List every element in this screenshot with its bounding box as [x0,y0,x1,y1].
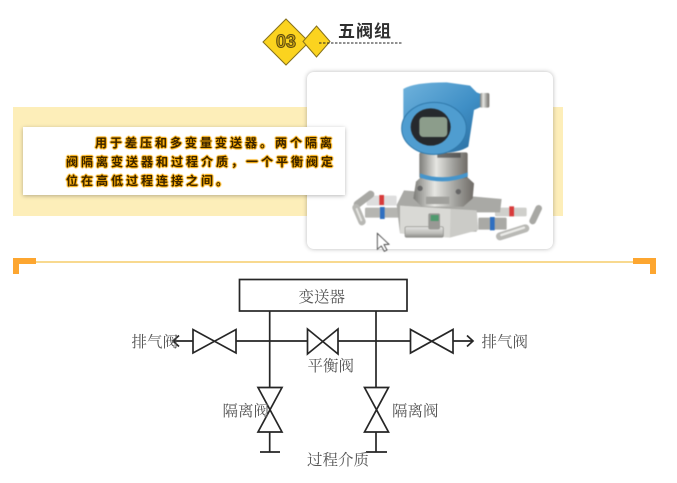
transmitter neck [419,152,468,181]
manifold right handles [478,206,539,236]
transmitter box [240,280,407,311]
label: right isolation valve: 隔离阀 [392,402,439,420]
icon: left corner bracket [13,258,36,274]
image: transmitter with five-valve manifold [352,82,542,252]
text block: description: 用于差压和多变量变送器。两个隔离 [95,136,335,150]
diagram: five-valve manifold schematic [132,278,528,469]
icon: right corner bracket [633,258,656,274]
label: left isolation valve: 隔离阀 [222,402,269,420]
label: transmitter: 变送器 [298,288,346,306]
text block: description [64,134,336,188]
icon: small diamond [303,26,330,57]
icon: large diamond with number [263,19,309,65]
panel: description card [23,127,345,195]
title text: 五阀组 [338,22,392,41]
transmitter flange [413,175,474,207]
icon: large diamond with number: 03 [276,32,296,52]
title dashed underline [319,42,403,44]
manifold left handles [356,194,400,222]
icon: mouse cursor [377,233,389,251]
manifold body [397,190,502,238]
heading: section badge and title [262,18,402,66]
pipes [173,311,473,452]
text block: description: 位在高低过程连接之间。 [66,174,231,188]
left isolation valve [258,388,282,432]
transmitter housing [402,82,489,154]
divider line with corner brackets [13,258,656,274]
label: process medium: 过程介质 [307,451,369,469]
text block: description: 阀隔离变送器和过程介质，一个平衡阀定 [66,155,336,169]
label: right vent valve: 排气阀 [482,333,528,351]
right isolation valve [364,388,388,432]
panel: product photo card [307,72,553,249]
label: left vent valve: 排气阀 [132,333,178,351]
panel: yellow background band [13,107,563,216]
equalizing valve [308,329,338,354]
label: equalizing valve: 平衡阀 [308,357,354,375]
left vent valve [193,330,236,353]
right vent valve [410,330,453,353]
